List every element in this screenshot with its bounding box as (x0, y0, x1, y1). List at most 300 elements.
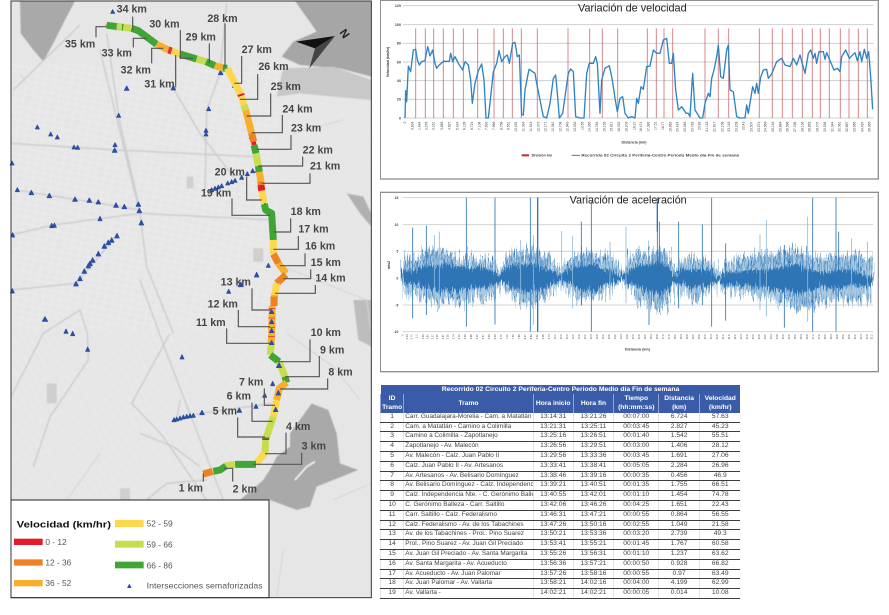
data table: Av. Juan Gil Preciado - Av. Santa Margarita (405, 550, 527, 557)
data table: 74.78 (712, 491, 729, 498)
x axis labels: 6.139 (462, 122, 466, 130)
km labels: 33 km (102, 48, 132, 60)
y axis labels: 100 (395, 23, 401, 27)
data table: 00:04:00 (623, 579, 649, 586)
data table: 10.08 (712, 589, 729, 596)
chart legend: División km (532, 154, 553, 158)
km labels: 28 km (207, 13, 238, 25)
x axis labels: 19.6 (698, 334, 701, 339)
x axis labels: 20.782 (690, 122, 694, 132)
km labels: 9 km (320, 344, 344, 356)
data table: (km) (672, 404, 686, 411)
legend (11, 500, 269, 598)
data table: 45.23 (712, 423, 729, 430)
x axis labels: 15.2 (632, 334, 635, 339)
data table: 00:03:00 (623, 442, 649, 449)
x axis labels: 14.4 (620, 334, 623, 339)
x axis labels: 2.97 (442, 334, 445, 339)
x axis labels: 10.1 (554, 334, 557, 339)
gridlines (403, 198, 873, 332)
x axis labels: 21.817 (712, 122, 716, 132)
data table: 60.58 (712, 540, 729, 547)
data table: Calz. Independencia Nte. - C. Gerónimo Balle (405, 491, 533, 498)
km labels: 29 km (186, 32, 216, 44)
x axis labels: 12.171 (544, 122, 548, 132)
x axis labels: 35.365 (868, 122, 872, 132)
x axis labels: 8.758 (499, 122, 503, 130)
y axis labels: -5 (395, 303, 398, 307)
x axis labels: 1.81 (427, 334, 430, 339)
x axis labels: 13.6 (608, 334, 611, 339)
data table: 00:03:45 (623, 423, 649, 430)
x axis labels: 22.158 (720, 122, 724, 132)
dense centre band (402, 262, 873, 293)
x axis labels: 12.8 (596, 334, 599, 339)
legend: 59 - 66 (147, 539, 173, 549)
x axis labels: 12.4 (590, 334, 593, 339)
data table: 4 (390, 442, 394, 449)
data table: 7 (390, 472, 394, 479)
acceleration noise envelope (402, 248, 873, 312)
data table: 00:02:55 (623, 521, 649, 528)
data table: 26.96 (712, 462, 729, 469)
data table: 0.97 (673, 570, 686, 577)
data table: 63.49 (712, 570, 729, 577)
x axis labels: 21.118 (705, 122, 709, 132)
x axis labels: 22.8 (746, 334, 749, 339)
data table: 00:03:20 (623, 530, 649, 537)
data table: 4.199 (671, 579, 688, 586)
data table: 16 (388, 560, 396, 567)
x axis labels: 26.8 (806, 334, 809, 339)
data table: 5 (390, 452, 394, 459)
data table: 2.739 (671, 530, 688, 537)
km labels: 22 km (303, 144, 333, 156)
data table: 18 (388, 579, 396, 586)
data table: (hh:mm:ss) (618, 404, 654, 411)
icon: north arrow (296, 27, 351, 68)
x axis labels: 20.424 (676, 122, 680, 132)
chart title: Variación de aceleración (570, 195, 687, 207)
x axis labels: 27.6 (818, 334, 821, 339)
data table: 13:57:21 (580, 560, 606, 567)
data table: 14:02:16 (580, 579, 606, 586)
gridlines (403, 6, 873, 118)
data table: 1.454 (671, 491, 688, 498)
x axis labels: 16.203 (624, 122, 628, 132)
x axis labels: 9.01 (536, 334, 539, 339)
data table: Av. de los Tabachines - Prol.. Pino Suarez (405, 530, 524, 537)
data table: Calz. Juan Pablo II - Av. Artesanos (405, 462, 503, 469)
x axis labels: 27.336 (793, 122, 797, 132)
x axis labels: 2.55 (436, 334, 439, 339)
x axis labels: 6.72 (500, 334, 503, 339)
x axis labels (401, 334, 874, 339)
x axis labels: 2.276 (424, 122, 428, 130)
x axis labels: 20.8 (716, 334, 719, 339)
y axis labels: 80 (397, 42, 401, 46)
x axis labels: 32.667 (845, 122, 849, 132)
data table: 13:58:21 (540, 579, 566, 586)
x axis labels: 28.852 (808, 122, 812, 132)
data table: Av. Malecón - Calz. Juan Pablo II (405, 452, 499, 459)
x axis labels: 3.74 (453, 334, 456, 339)
y axis labels (386, 4, 401, 120)
data table: Cam. a Matatlán - Camino a Colimilla (405, 423, 511, 430)
data table: 0.928 (671, 560, 688, 567)
data table: ID (389, 395, 395, 402)
acceleration spikes (413, 198, 867, 332)
x axis labels: 6.724 (470, 122, 474, 130)
x axis labels: 12.708 (558, 122, 562, 132)
data table: Tiempo (624, 395, 648, 402)
data table: 62.99 (712, 579, 729, 586)
y axis labels: -10 (394, 330, 398, 334)
legend: Velocidad (km/hr) (17, 519, 111, 529)
data table: 17 (388, 570, 396, 577)
data table: 6.724 (671, 413, 688, 420)
x axis labels: 15.811 (610, 122, 614, 132)
chart title: Variación de velocidad (578, 3, 687, 15)
km labels: 1 km (179, 482, 203, 494)
x axis labels: 14.026 (588, 122, 592, 132)
data table: Camino a Colimilla - Zapotlanejo (405, 432, 498, 439)
x axis labels: 15.159 (602, 122, 606, 132)
x axis labels: 28.0 (824, 334, 827, 339)
data table: 00:03:45 (623, 452, 649, 459)
data table: 13:21:26 (580, 413, 606, 420)
data table: 13:33:41 (540, 462, 566, 469)
x axis labels: 13.55 (580, 122, 584, 130)
data table: 13:55:26 (540, 550, 566, 557)
x axis labels: 18.0 (674, 334, 677, 339)
x axis labels: 25.2 (782, 334, 785, 339)
km labels: 7 km (239, 376, 263, 388)
km labels: 19 km (201, 188, 231, 200)
data table: Carr. Guadalajara-Morelia - Cam. a Matatlán (405, 413, 531, 420)
data table: 57.63 (712, 413, 729, 420)
x axis labels: 31.2 (871, 334, 874, 339)
x axis labels: 7.52 (512, 334, 515, 339)
x axis labels: 24.569 (764, 122, 768, 132)
x axis labels: 9.551 (507, 122, 511, 130)
data table: 13:53:36 (580, 530, 606, 537)
x axis labels: 22.4 (740, 334, 743, 339)
x axis labels: 19.862 (668, 122, 672, 132)
x axis labels: 5.57 (482, 334, 485, 339)
y axis labels: 0 (399, 116, 401, 120)
x axis labels: 23.209 (734, 122, 738, 132)
x axis labels: 25.6 (788, 334, 791, 339)
x axis labels: 18.4 (680, 334, 683, 339)
x axis labels: 17.082 (646, 122, 650, 132)
speed line (405, 38, 873, 118)
data table: 00:01:10 (623, 491, 649, 498)
y axis labels: 15 (395, 196, 398, 200)
km labels: 16 km (305, 241, 335, 253)
x axis labels: 2.17 (431, 334, 434, 339)
x axis labels: 23.2 (752, 334, 755, 339)
x axis labels: 29.2 (842, 334, 845, 339)
x axis labels: 0.634 (410, 122, 414, 130)
x axis labels: 5.424 (455, 122, 459, 130)
x axis labels: 7.11 (506, 334, 509, 339)
data table: 00:01:45 (623, 540, 649, 547)
x axis labels: 14.8 (626, 334, 629, 339)
leader lines (96, 17, 328, 482)
data table: 13:14:31 (540, 413, 566, 420)
km labels: 32 km (121, 64, 151, 76)
x axis labels: 21.2 (722, 334, 725, 339)
data table: 13:40:55 (540, 491, 566, 498)
x axis labels: 20.92 (698, 122, 702, 130)
data table: 13:42:01 (580, 491, 606, 498)
data table: Recorrido 02 Circuito 2 Periferia-Centro Periodo Medio día Fin de semana (442, 386, 679, 393)
x axis labels: 13.2 (602, 334, 605, 339)
x axis labels: 16.032 (617, 122, 621, 132)
x axis labels: 34.497 (860, 122, 864, 132)
x axis labels: 20.0 (704, 334, 707, 339)
x axis labels: 14.0 (614, 334, 617, 339)
base map (11, 1, 371, 598)
data table: 13:47:21 (580, 511, 606, 518)
y axis labels: 10 (395, 223, 398, 227)
data table: 00:00:55 (623, 511, 649, 518)
km labels: 4 km (286, 421, 310, 433)
km labels: 27 km (242, 44, 272, 56)
chart legend (522, 154, 740, 158)
data table: 1.237 (671, 550, 688, 557)
x axis labels: 27.2 (812, 334, 815, 339)
data table: 13:29:56 (540, 452, 566, 459)
x axis labels: 1.484 (418, 122, 422, 130)
data table: 6 (390, 462, 394, 469)
x axis labels: 18.8 (686, 334, 689, 339)
data table: Velocidad (705, 395, 736, 402)
y axis labels: Velocidad (km/hr) (386, 46, 390, 77)
x axis labels: 23.507 (750, 122, 754, 132)
data table: 13:46:26 (580, 501, 606, 508)
km labels: 12 km (208, 299, 238, 311)
x axis labels: 24.0 (764, 334, 767, 339)
x axis labels: 24.4 (770, 334, 773, 339)
x axis labels: 12.072 (536, 122, 540, 132)
x axis labels: 13.332 (573, 122, 577, 132)
x axis labels: 30.4 (860, 334, 863, 339)
x axis labels: 4.627 (448, 122, 452, 130)
km labels: 34 km (117, 4, 147, 16)
data table: 66.82 (712, 560, 729, 567)
data table: Zapotlanejo - Av. Malecón (405, 442, 479, 449)
km division lines (416, 28, 867, 118)
x axis labels: 20.546 (683, 122, 687, 132)
data table: 2.827 (671, 423, 688, 430)
data table: Tramo (382, 404, 402, 411)
x axis labels: 25.146 (771, 122, 775, 132)
x axis labels: 26.596 (786, 122, 790, 132)
route intersections on the line (269, 309, 282, 412)
data table: 2.284 (671, 462, 688, 469)
x axis labels: 23.574 (757, 122, 761, 132)
x axis labels: 7.966 (492, 122, 496, 130)
x axis labels: 9.36 (542, 334, 545, 339)
data table: 0.456 (671, 472, 688, 479)
x axis labels: 14.784 (595, 122, 599, 132)
y axis labels: m/s2 (387, 261, 391, 269)
data table: 1.651 (671, 501, 688, 508)
data table: Hora inicio (536, 400, 570, 407)
x axis labels: 1.39 (422, 334, 425, 339)
data table: Tramo (458, 400, 479, 407)
map panel (10, 0, 372, 598)
x axis labels: 24.8 (776, 334, 779, 339)
x axis labels: 7.108 (477, 122, 481, 130)
x axis labels: 0 (403, 122, 407, 124)
y axis labels: 0 (396, 277, 398, 281)
data table: 13:38:41 (580, 462, 606, 469)
chart: variación de aceleración (380, 192, 879, 372)
y axis labels: 5 (396, 250, 398, 254)
x axis labels: 29.6 (848, 334, 851, 339)
km labels: 11 km (196, 317, 226, 329)
x axis labels: 28.8 (836, 334, 839, 339)
data table: 1 (390, 413, 394, 420)
x axis labels: 16.4 (650, 334, 653, 339)
x axis labels: 8.27 (524, 334, 527, 339)
data table: 56.55 (712, 511, 729, 518)
data table: 11 (389, 511, 396, 518)
y axis labels: 60 (397, 60, 401, 64)
data table: C. Gerónimo Balleza - Carr. Saltillo (405, 501, 504, 508)
data table: 14 (388, 540, 396, 547)
data table: Hora fin (581, 400, 606, 407)
x axis title: Distancia (km) (622, 140, 647, 144)
y axis labels: 20 (397, 98, 401, 102)
x axis labels: 3.161 (432, 122, 436, 130)
data table: 10 (388, 501, 396, 508)
km labels: 31 km (144, 79, 175, 91)
data table: 00:01:35 (623, 481, 649, 488)
data table: 13:47:26 (540, 521, 566, 528)
data table: 2 (390, 423, 394, 430)
x axis labels: 10.452 (514, 122, 518, 132)
data table: 14:02:21 (580, 589, 606, 596)
data table: Distancia (664, 395, 694, 402)
x axis labels: 16.474 (639, 122, 643, 132)
x axis title: Distancia (km) (625, 347, 651, 351)
km labels: 18 km (291, 206, 321, 218)
data table: 00:01:40 (623, 432, 649, 439)
data table: 1.755 (671, 481, 688, 488)
data table: 00:05:05 (623, 462, 649, 469)
data table: 13:39:16 (580, 472, 606, 479)
data table: 0.014 (671, 589, 688, 596)
legend: 52 - 59 (147, 519, 173, 529)
data table: 1.049 (671, 521, 688, 528)
map frame (11, 1, 371, 598)
data table: 00:00:35 (623, 472, 649, 479)
x axis labels: 29.707 (816, 122, 820, 132)
y axis labels (387, 196, 398, 334)
x axis labels: 1.1 (415, 334, 418, 338)
x axis labels: 22.0 (734, 334, 737, 339)
x axis labels: 25.884 (778, 122, 782, 132)
x axis labels: 11.2 (572, 334, 575, 339)
legend: 36 - 52 (45, 578, 72, 588)
km labels (65, 4, 353, 495)
route speed line (105, 25, 287, 474)
data table: 13:56:31 (580, 550, 606, 557)
km labels: 35 km (65, 39, 95, 51)
x axis labels: 16.8 (656, 334, 659, 339)
data table: Calz. Federalismo - Av. de los Tabachines (405, 521, 524, 528)
data table: 1.691 (671, 452, 688, 459)
data table: 19 (388, 589, 396, 596)
km labels: 3 km (302, 441, 326, 453)
x axis labels: 19.2 (692, 334, 695, 339)
x axis labels: 6.33 (494, 334, 497, 339)
km labels: 6 km (227, 391, 251, 403)
data table: 13:56:36 (540, 560, 566, 567)
x axis labels: 26.4 (800, 334, 803, 339)
data table: 14:02:21 (540, 589, 566, 596)
x axis labels: 17.2 (662, 334, 665, 339)
x axis labels: 0.71 (411, 334, 414, 339)
data table: 27.06 (712, 452, 729, 459)
data table: 9 (390, 491, 394, 498)
x axis labels: 32.061 (838, 122, 842, 132)
data table: 00:04:25 (623, 501, 649, 508)
data table: Prol.. Pino Suarez - Av. Juan Gil Preciado (405, 540, 523, 547)
data table (380, 385, 740, 599)
data table: Carr. Saltillo - Calz. Federalismo (405, 511, 497, 518)
legend: 66 - 86 (147, 560, 173, 570)
data table: 13:50:16 (580, 521, 606, 528)
km labels: 25 km (271, 81, 301, 93)
km labels: 20 km (215, 167, 245, 179)
x axis labels: 18.77 (661, 122, 665, 130)
km labels: 30 km (149, 18, 180, 30)
x axis labels: 11.6 (578, 334, 581, 339)
x axis labels: 28.4 (830, 334, 833, 339)
data table: 13:46:31 (540, 511, 566, 518)
data table: 00:00:55 (623, 570, 649, 577)
x axis labels: 17.6 (668, 334, 671, 339)
data table: 13:33:36 (580, 452, 606, 459)
data table: 13:40:51 (580, 481, 606, 488)
x axis labels: 30.536 (823, 122, 827, 132)
x axis labels: 3.865 (440, 122, 444, 130)
x axis labels: 30.8 (866, 334, 869, 339)
data table: 1.542 (671, 432, 688, 439)
chart: variación de velocidad (380, 0, 879, 180)
chart legend: Recorrido 02 Circuito 2 Periferia-Centro Periodo Medio día Fin de semana (581, 154, 740, 158)
x axis labels: 16.0 (644, 334, 647, 339)
data table: 00:01:10 (623, 550, 649, 557)
x axis labels: 5.93 (488, 334, 491, 339)
km labels: 24 km (282, 103, 313, 115)
x axis labels: 21.6 (728, 334, 731, 339)
data table: 13:21:31 (540, 423, 566, 430)
x axis labels: 9.74 (548, 334, 551, 339)
data table: Av. Vallarta - (405, 589, 441, 596)
x axis labels: 23.6 (758, 334, 761, 339)
km labels: 8 km (328, 366, 353, 378)
km labels: 17 km (298, 224, 329, 236)
data table: 13 (388, 530, 396, 537)
data table: 13:50:21 (540, 530, 566, 537)
data table: Av. Acueducto - Av. Juan Palomar (405, 570, 501, 577)
